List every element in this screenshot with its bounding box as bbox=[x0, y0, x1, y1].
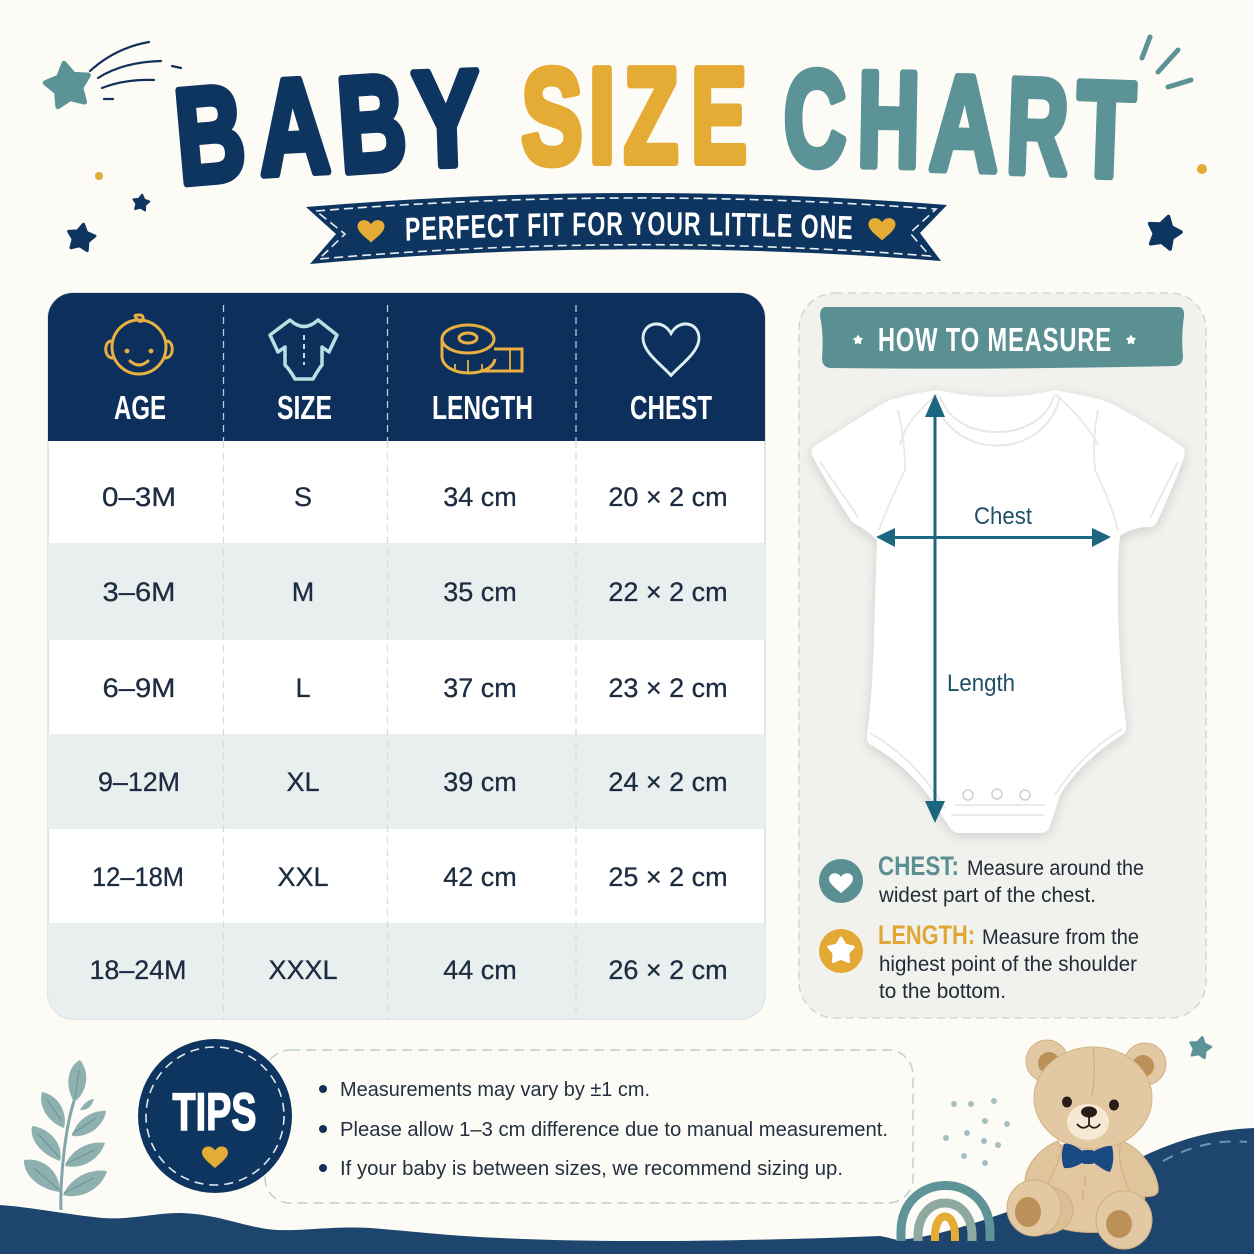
feet bbox=[1007, 1180, 1152, 1249]
title word: BABY bbox=[169, 42, 482, 213]
table row: 0–3M: 0–3M bbox=[102, 482, 176, 512]
table row: 18–24M: XXXL bbox=[268, 955, 338, 985]
head bbox=[1034, 1047, 1152, 1149]
table row: 6–9M: 6–9M bbox=[102, 673, 176, 703]
label: length: Length bbox=[947, 670, 1015, 697]
heading banner bbox=[820, 307, 1184, 369]
icon: heart outline bbox=[643, 324, 699, 375]
heading banner: HOW TO MEASURE bbox=[878, 322, 1111, 359]
column headings: SIZE bbox=[277, 389, 332, 426]
title word: CHART: H bbox=[856, 44, 921, 196]
table row: 12–18M bbox=[92, 862, 728, 892]
table row: 18–24M bbox=[90, 955, 728, 985]
icon: small decorations left bbox=[66, 172, 150, 251]
ribbon text: PERFECT FIT FOR YOUR LITTLE ONE bbox=[406, 212, 852, 241]
table row: 6–9M bbox=[102, 673, 728, 703]
icon: baby face bbox=[106, 315, 172, 374]
chest instruction bbox=[878, 851, 1144, 907]
title bbox=[169, 39, 1137, 213]
length instruction: LENGTH: bbox=[878, 920, 975, 950]
table row: 0–3M: 20 × 2 cm bbox=[608, 482, 728, 512]
table row: 3–6M: 3–6M bbox=[102, 577, 176, 607]
icon: heart bbox=[358, 220, 384, 242]
column headings: CHEST bbox=[630, 389, 712, 426]
table row: 18–24M: 18–24M bbox=[90, 955, 186, 985]
table row: 9–12M bbox=[98, 767, 728, 797]
face bbox=[1062, 1096, 1119, 1140]
table row: 3–6M: 35 cm bbox=[443, 577, 517, 607]
bottom wave bbox=[0, 1128, 1254, 1254]
table row: 9–12M: XL bbox=[286, 767, 320, 797]
table row: 0–3M: 34 cm bbox=[443, 482, 517, 512]
table row: 6–9M: 37 cm bbox=[443, 673, 517, 703]
title word: CHART: A bbox=[928, 47, 1000, 200]
table row: 3–6M: 22 × 2 cm bbox=[608, 577, 728, 607]
table row: 0–3M bbox=[102, 482, 728, 512]
icon: dots bbox=[943, 1098, 1010, 1166]
table row: 6–9M: 23 × 2 cm bbox=[608, 673, 728, 703]
chest instruction: CHEST: bbox=[878, 851, 959, 881]
title word: BABY: Y bbox=[410, 42, 482, 196]
table row: 12–18M: XXL bbox=[277, 862, 329, 892]
table row: 12–18M: 25 × 2 cm bbox=[608, 862, 728, 892]
icon: bodysuit bbox=[270, 320, 337, 379]
table row: 3–6M bbox=[102, 577, 728, 607]
column headings: AGE bbox=[114, 389, 166, 426]
icon: sparkle lines and decorations right bbox=[1142, 37, 1207, 250]
column headings bbox=[114, 389, 712, 426]
table row: 0–3M: S bbox=[294, 482, 312, 512]
table row: 6–9M: L bbox=[295, 673, 311, 703]
stitched line on wave bbox=[1163, 1141, 1247, 1161]
title word: BABY: B bbox=[333, 46, 411, 201]
table row: 12–18M: 42 cm bbox=[443, 862, 517, 892]
arrow: length bbox=[925, 394, 945, 823]
title word: CHART bbox=[784, 44, 1137, 206]
bodysuit illustration bbox=[812, 390, 1185, 836]
table row: 9–12M: 24 × 2 cm bbox=[608, 767, 728, 797]
icon: heart bbox=[202, 1146, 228, 1168]
ribbon banner bbox=[306, 193, 947, 264]
title word: SIZE: Z bbox=[624, 40, 678, 192]
panel: size table bbox=[48, 293, 765, 1019]
title word: SIZE bbox=[521, 39, 747, 192]
title word: CHART: T bbox=[1074, 53, 1137, 206]
tips badge: TIPS bbox=[172, 1083, 256, 1142]
chest instruction: widest part of the chest. bbox=[878, 884, 1096, 907]
teddy bear bbox=[1007, 1040, 1166, 1249]
length instruction bbox=[878, 920, 1139, 1003]
title word: BABY: A bbox=[255, 50, 333, 203]
length instruction: highest point of the shoulder bbox=[879, 953, 1137, 976]
table row: 3–6M: M bbox=[292, 577, 314, 607]
icon: length star bbox=[819, 929, 863, 973]
title word: SIZE: S bbox=[521, 43, 583, 192]
ears bbox=[1026, 1040, 1166, 1085]
table row: 9–12M: 9–12M bbox=[98, 767, 180, 797]
title word: SIZE: I bbox=[588, 40, 616, 191]
tips box bbox=[265, 1050, 913, 1203]
tip 3: If your baby is between sizes, we recommend sizing up. bbox=[340, 1157, 843, 1180]
title word: SIZE: E bbox=[691, 39, 747, 191]
tips badge bbox=[138, 1039, 292, 1193]
length instruction: Measure from the bbox=[982, 926, 1139, 949]
arrow: chest bbox=[876, 528, 1111, 547]
head seam bbox=[1083, 1048, 1094, 1200]
bow tie bbox=[1062, 1144, 1113, 1172]
panel: how to measure bbox=[799, 293, 1206, 1018]
icon: plant bbox=[24, 1060, 107, 1210]
length instruction: to the bottom. bbox=[879, 980, 1006, 1003]
column headings: LENGTH bbox=[432, 389, 533, 426]
icon: star right bbox=[1188, 1035, 1213, 1059]
label: chest: Chest bbox=[974, 503, 1032, 530]
icon: shooting star bbox=[42, 42, 181, 108]
title word: BABY: B bbox=[169, 57, 251, 213]
icon: measuring tape bbox=[442, 325, 522, 373]
icon: chest heart bbox=[819, 859, 863, 903]
title word: CHART: R bbox=[1004, 50, 1071, 203]
table row: 9–12M: 39 cm bbox=[443, 767, 517, 797]
title word: CHART: C bbox=[784, 44, 846, 195]
body bbox=[1036, 1145, 1145, 1232]
icon: rainbow bbox=[901, 1186, 990, 1241]
arms bbox=[1025, 1141, 1158, 1197]
tip 2: Please allow 1–3 cm difference due to manual measurement. bbox=[340, 1118, 888, 1141]
tip 1: Measurements may vary by ±1 cm. bbox=[340, 1078, 650, 1101]
icon: heart bbox=[868, 218, 896, 240]
chest instruction: Measure around the bbox=[967, 857, 1144, 880]
table row: 18–24M: 44 cm bbox=[443, 955, 517, 985]
table row: 12–18M: 12–18M bbox=[92, 862, 184, 892]
table row: 18–24M: 26 × 2 cm bbox=[608, 955, 728, 985]
